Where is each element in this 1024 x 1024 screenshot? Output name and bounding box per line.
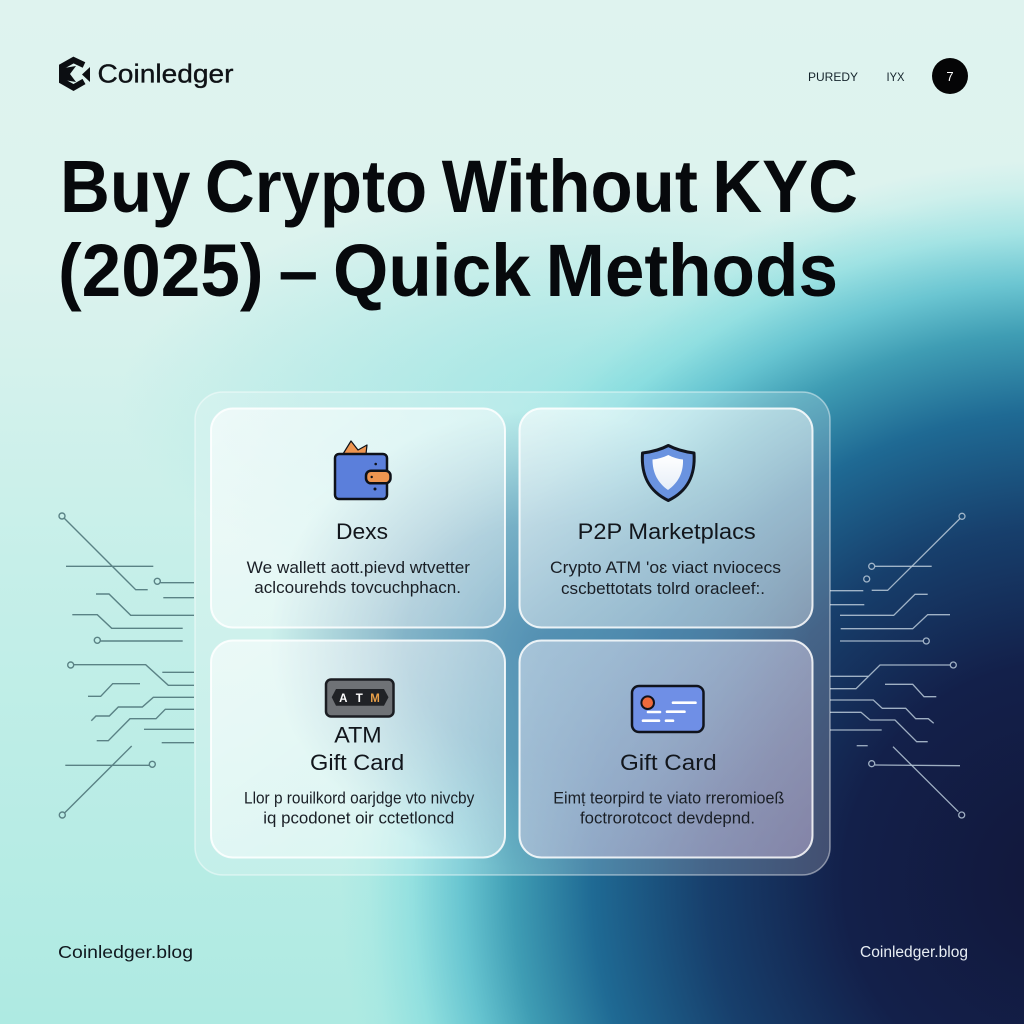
panel: P2P Marketplacs <box>520 408 812 628</box>
logo: Coinledger <box>62 58 234 88</box>
card text: aclcourehds tovcuchphacn. <box>254 579 461 597</box>
nav item: IYX: IYX <box>886 70 904 84</box>
wordmark: Coinledger <box>98 58 234 88</box>
card text: Eimṭ teorpird te viato rreromioeß <box>553 789 784 807</box>
panel: Gift Card <box>520 640 812 858</box>
card heading: ATM <box>334 722 382 747</box>
card text: Llor p rouilkord oarjdge vto nivcby <box>244 789 475 807</box>
card text: Crypto ATM 'oɛ viact nviocecs <box>550 559 781 577</box>
top navigation <box>808 58 968 94</box>
icon: ATM sign: M <box>370 693 380 705</box>
icon: ATM sign <box>326 680 394 716</box>
title: Buy Crypto Without KYC <box>60 145 858 228</box>
icon: shield <box>642 446 694 500</box>
icon: wallet <box>335 441 390 499</box>
title <box>58 145 858 312</box>
card text <box>244 789 475 827</box>
icon: card <box>632 686 704 732</box>
panel: ATM Gift Card <box>211 640 505 858</box>
footer: left site name: Coinledger.blog <box>58 942 193 962</box>
footer: right site name: Coinledger.blog <box>860 944 968 961</box>
card text <box>247 559 471 597</box>
card text: foctrorotcoct devdepnd. <box>580 809 755 827</box>
card text: iq pcodonet oir cctetloncd <box>263 809 454 827</box>
card text <box>553 789 784 827</box>
card text: cscbettotats tolrd oracleef:. <box>561 580 765 598</box>
nav badge: 7: 7 <box>946 69 954 84</box>
panel: Dexs <box>211 408 505 628</box>
icon: ATM sign: T <box>356 693 363 705</box>
card text: We wallett aott.pievd wtvetter <box>247 559 471 577</box>
nav item: PUREDY: PUREDY <box>808 70 858 84</box>
card heading: Dexs <box>336 519 388 544</box>
title: (2025) – Quick Methods <box>58 229 838 312</box>
circuit lines: left <box>59 513 194 818</box>
card heading: Gift Card <box>620 750 717 775</box>
icon: ATM sign: A <box>339 693 347 705</box>
card text <box>550 559 781 598</box>
panel: glass container <box>195 392 830 875</box>
card heading <box>310 722 404 775</box>
card heading: P2P Marketplacs <box>578 519 756 544</box>
nav badge: 7 <box>932 58 968 94</box>
card heading: Gift Card <box>310 750 404 775</box>
icon: logo mark <box>62 60 90 88</box>
circuit lines: right <box>830 513 965 818</box>
